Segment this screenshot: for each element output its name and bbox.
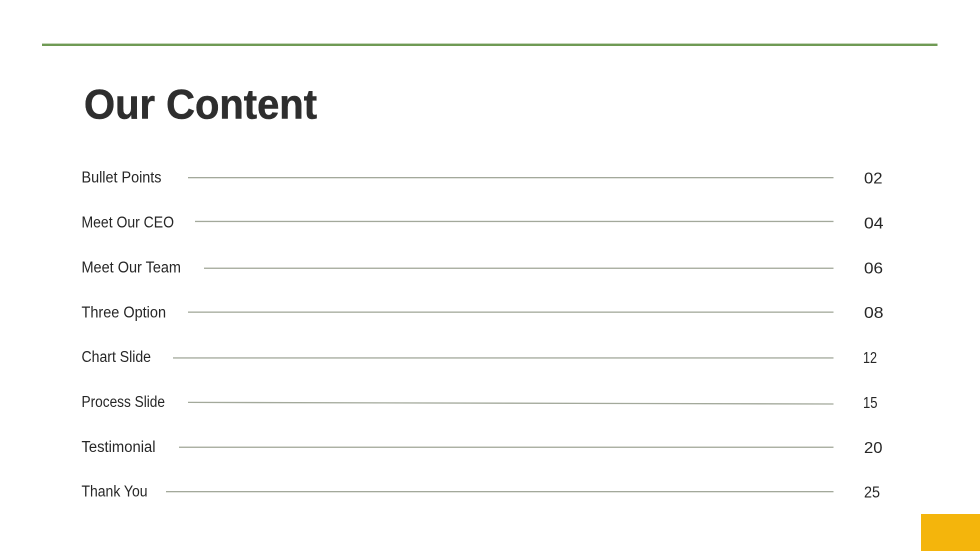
contents list: [82, 170, 884, 502]
row: Meet Our Team: Meet Our Team: [82, 260, 181, 276]
row: Bullet Points: Bullet Points: [82, 170, 162, 186]
row: Process Slide: Process Slide: [82, 394, 165, 411]
row: Three Option: [82, 304, 884, 322]
row: Meet Our Team: [82, 260, 883, 278]
row: Process Slide: 15: [863, 395, 878, 412]
row: Chart Slide: 12: [863, 350, 877, 367]
row: Testimonial: [82, 439, 883, 457]
top green rule: [42, 44, 938, 46]
row: Thank You: Thank You: [82, 484, 148, 500]
title: Our Content: [84, 80, 317, 128]
row: Meet Our CEO: [82, 214, 884, 232]
row: Chart Slide: [82, 349, 877, 367]
row: Testimonial: 20: [864, 440, 883, 457]
row: Meet Our Team: 06: [864, 260, 883, 278]
row: Meet Our CEO: Meet Our CEO: [82, 214, 174, 232]
row: Three Option: Three Option: [82, 304, 166, 322]
row: Thank You: [82, 484, 880, 502]
row: Bullet Points: 02: [864, 170, 882, 188]
row: Chart Slide: Chart Slide: [82, 349, 151, 366]
yellow corner block: [921, 514, 980, 551]
row: Process Slide: [82, 394, 878, 412]
row: Bullet Points: [82, 170, 882, 188]
row: Thank You: 25: [864, 484, 880, 502]
row: Three Option: 08: [864, 305, 884, 322]
row: Meet Our CEO: 04: [864, 216, 884, 232]
row: Testimonial: Testimonial: [82, 439, 156, 456]
